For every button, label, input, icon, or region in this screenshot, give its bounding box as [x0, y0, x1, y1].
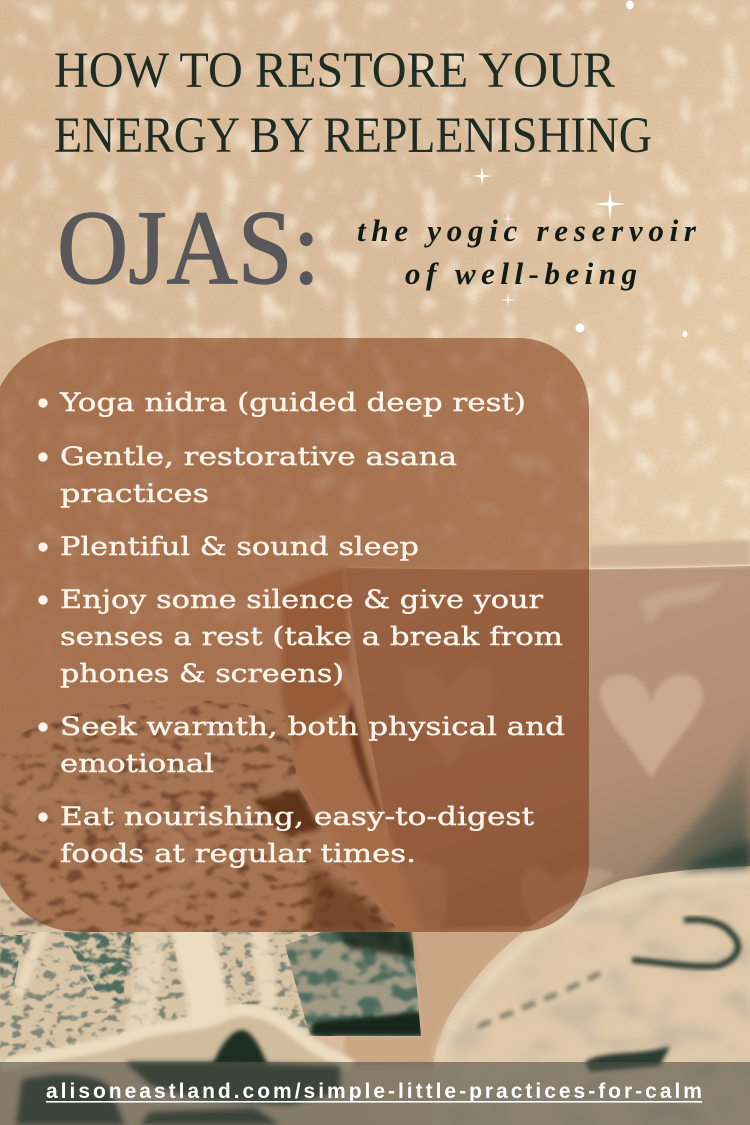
ribs seen through panel	[0, 794, 195, 932]
sparkles and dots	[472, 0, 688, 337]
practices list: Seek warmth, both physical and	[60, 712, 565, 742]
lower mug bottom	[345, 925, 560, 1066]
practices list: foods at regular times.	[60, 839, 416, 869]
lower hearts behind panel	[399, 858, 615, 958]
mug body	[345, 540, 750, 1040]
subtitle: the yogic reservoir of well-being: of well-being	[405, 256, 637, 291]
practices list: Enjoy some silence & give your	[60, 585, 544, 615]
subtitle: the yogic reservoir of well-being: the yogic reservoir	[357, 213, 697, 248]
practices list: phones & screens)	[60, 659, 344, 689]
footer link: alisoneastland.com/simple-little-practices-for-calm	[46, 1080, 702, 1103]
title	[54, 43, 652, 164]
title: HOW TO RESTORE YOUR	[54, 43, 615, 99]
practices list: Eat nourishing, easy-to-digest	[60, 802, 535, 832]
practices list: practices	[60, 479, 209, 509]
practices list: Plentiful & sound sleep	[60, 532, 419, 562]
practices list: senses a rest (take a break from	[60, 622, 563, 652]
window backdrop with bokeh	[0, 0, 750, 624]
practices list: Yoga nidra (guided deep rest)	[59, 388, 526, 418]
heart on mug, behind panel	[402, 665, 495, 768]
blurred sweater foreground right	[432, 866, 750, 1074]
heart on mug, right	[600, 675, 703, 778]
practices list	[38, 388, 565, 869]
mug handle and reflection	[282, 566, 425, 935]
practices list: Gentle, restorative asana	[60, 442, 457, 472]
heading: OJAS: OJAS:	[57, 189, 320, 306]
practices list: emotional	[60, 749, 214, 779]
knitted sweater left	[0, 690, 440, 1067]
blurred sweater foreground left	[0, 1010, 372, 1125]
footer bar	[0, 1062, 750, 1125]
panel: practices list background	[0, 338, 589, 932]
title: ENERGY BY REPLENISHING	[54, 108, 652, 164]
subtitle: the yogic reservoir of well-being	[357, 213, 697, 291]
dark patch top right of sweater	[680, 842, 750, 872]
bullet markers	[38, 398, 48, 822]
